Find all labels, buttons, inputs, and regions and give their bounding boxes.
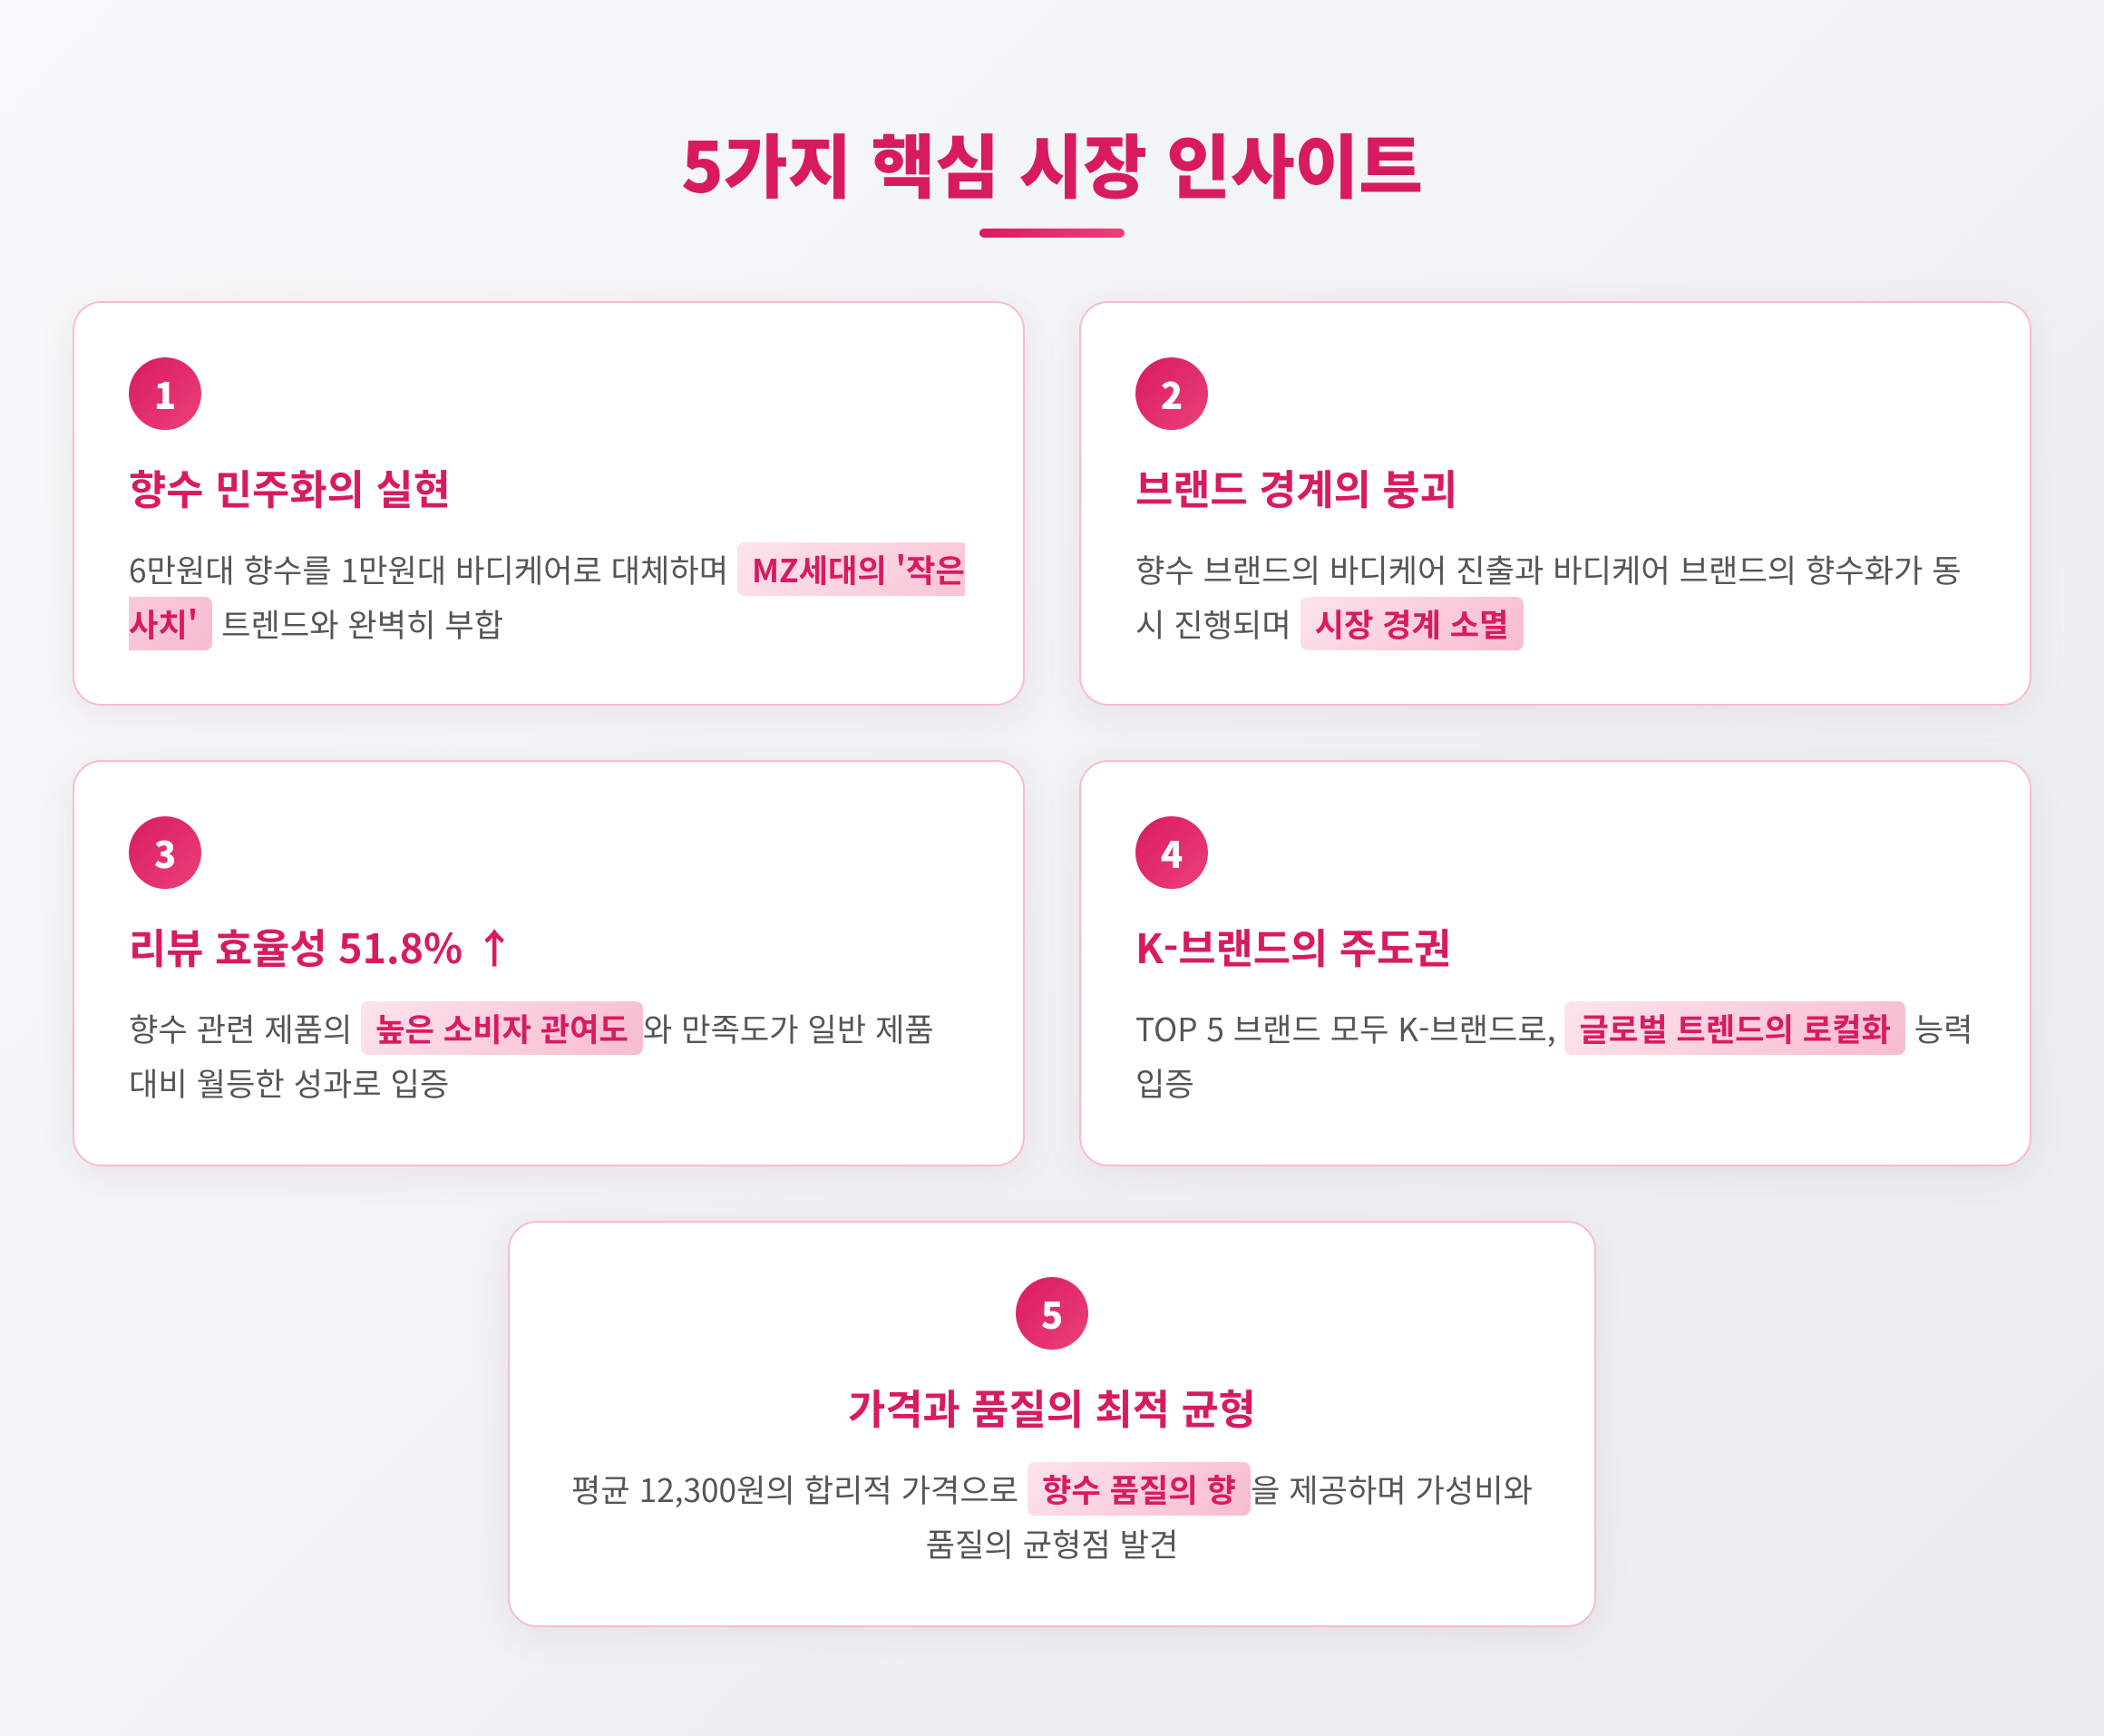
- heading 4: K-브랜드의 주도권: [1135, 916, 1451, 975]
- panel: insight 2: [1079, 301, 2031, 706]
- panel: insight 3: [73, 760, 1025, 1166]
- text 3: 향수 관련 제품의 높은 소비자 관여도 와 만족도가 일반 제품 대비 월등한 성과로 입증: [129, 1005, 934, 1106]
- text 1: 6만원대 향수를 1만원대 바디케어로 대체하며 MZ세대의 '작은 사치' 트렌드와 완벽히 부합: [129, 546, 965, 647]
- heading 3: 리뷰 효율성 51.8% ↑: [129, 916, 515, 975]
- number badge 5: [1016, 1277, 1088, 1350]
- number badge 2: [1135, 357, 1208, 430]
- number badge 2: 2: [1161, 367, 1183, 420]
- heading 2: 브랜드 경계의 붕괴: [1135, 457, 1457, 516]
- number badge 3: [129, 816, 201, 889]
- number badge 5: 5: [1041, 1287, 1063, 1340]
- number badge 4: 4: [1161, 826, 1183, 879]
- number badge 1: [129, 357, 201, 430]
- number badge 1: 1: [154, 367, 176, 420]
- title: 5가지 핵심 시장 인사이트: [681, 112, 1423, 213]
- text 2: 향수 브랜드의 바디케어 진출과 바디케어 브랜드의 향수화가 동시 진행되며 시장 경계 소멸: [1135, 546, 1962, 647]
- title underline: [979, 229, 1125, 238]
- heading 5: 가격과 품질의 최적 균형: [848, 1377, 1256, 1436]
- text 4: TOP 5 브랜드 모두 K-브랜드로, 글로벌 트렌드의 로컬화 능력 입증: [1135, 1005, 1973, 1106]
- text 5: 평균 12,300원의 합리적 가격으로 향수 품질의 향 을 제공하며 가성비와 품질의 균형점 발견: [571, 1466, 1533, 1566]
- panel: insight 5: [508, 1221, 1596, 1627]
- panel: insight 1: [73, 301, 1025, 706]
- panel: insight 4: [1079, 760, 2031, 1166]
- heading 1: 향수 민주화의 실현: [129, 457, 451, 516]
- number badge 3: 3: [154, 826, 176, 879]
- number badge 4: [1135, 816, 1208, 889]
